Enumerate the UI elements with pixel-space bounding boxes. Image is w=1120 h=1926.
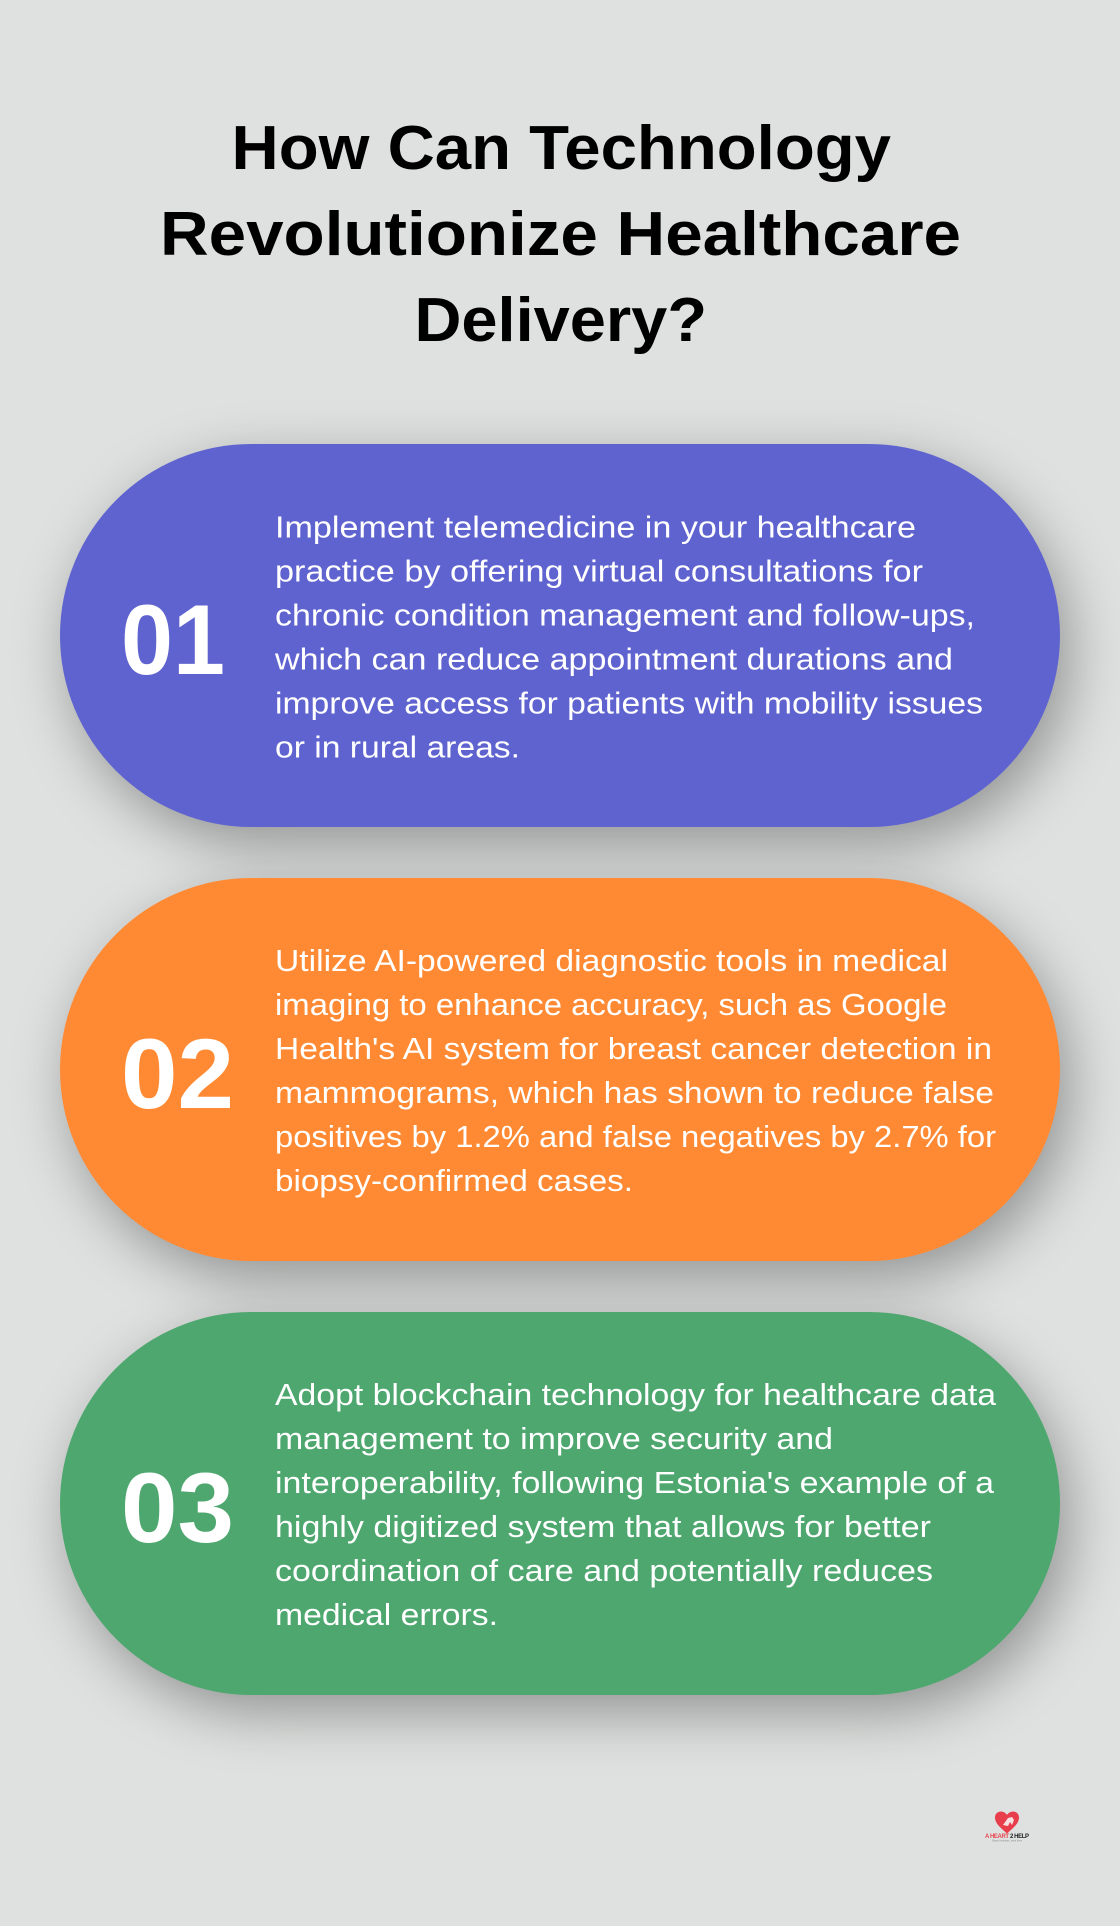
title: How Can Technology (232, 114, 892, 183)
panel: step 03 (60, 1312, 1060, 1695)
text block step 01: improve access for patients with mobility issues (275, 686, 983, 720)
text block step 03: highly digitized system that allows for better (275, 1509, 931, 1544)
text block step 03: medical errors. (275, 1597, 498, 1632)
title (160, 114, 961, 355)
text block step 01: practice by offering virtual consultations for (275, 554, 923, 588)
title: Revolutionize Healthcare (160, 200, 961, 269)
text block step 03 (275, 1377, 997, 1632)
title: Delivery? (414, 286, 707, 355)
text block step 02: biopsy-confirmed cases. (275, 1163, 633, 1198)
text block step 01: which can reduce appointment durations and (274, 642, 953, 676)
number 03: 03 (121, 1452, 234, 1563)
text block step 01 (274, 510, 983, 764)
text block step 02: mammograms, which has shown to reduce false (275, 1075, 994, 1110)
text block step 03: coordination of care and potentially reduces (275, 1553, 933, 1588)
number 01: 01 (121, 584, 225, 695)
text block step 02: Utilize AI-powered diagnostic tools in medical (275, 943, 948, 978)
text block step 02: positives by 1.2% and false negatives by 2.7% for (275, 1119, 996, 1154)
text block step 03: interoperability, following Estonia's example of a (275, 1465, 995, 1500)
text block step 02 (275, 943, 996, 1198)
logo: A Heart 2 Help (985, 1812, 1029, 1842)
pill background green (60, 1312, 1060, 1695)
text block step 01: or in rural areas. (275, 730, 520, 764)
text block step 03: management to improve security and (275, 1421, 833, 1456)
panel: step 02 (60, 878, 1060, 1261)
icon: heart (995, 1812, 1019, 1834)
panel: step 01 (60, 444, 1060, 827)
text block step 01: Implement telemedicine in your healthcare (275, 510, 916, 544)
text block step 02: imaging to enhance accuracy, such as Google (275, 987, 947, 1022)
pill background purple (60, 444, 1060, 827)
pill background orange (60, 878, 1060, 1261)
number 02: 02 (121, 1018, 234, 1129)
icon: hands (1003, 1817, 1014, 1826)
logo tagline: Share kindness, save lives (992, 1840, 1023, 1842)
text block step 01: chronic condition management and follow-ups, (275, 598, 975, 632)
text block step 02: Health's AI system for breast cancer detection in (275, 1031, 992, 1066)
text block step 03: Adopt blockchain technology for healthcare data (275, 1377, 997, 1412)
logo wordmark: A HEART 2 HELP (985, 1834, 1029, 1840)
